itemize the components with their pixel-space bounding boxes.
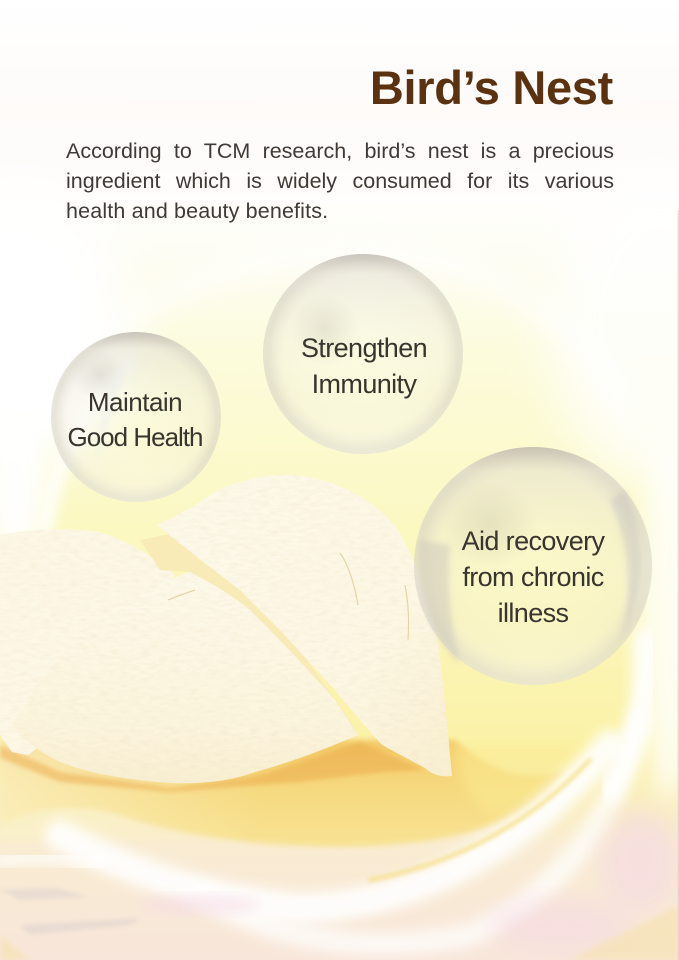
nest shadow on cloth bbox=[0, 742, 425, 792]
white fade at upper corners and sides bbox=[0, 190, 130, 470]
pale yellow patch right of nest bbox=[450, 745, 590, 815]
intro text bbox=[66, 139, 614, 223]
bird's nests bbox=[0, 475, 452, 792]
bubble: maintain good health bbox=[51, 332, 221, 502]
bubbles bbox=[51, 254, 652, 685]
nest: front bbox=[12, 572, 358, 783]
nest: right bbox=[157, 475, 452, 776]
bubble: aid recovery bbox=[414, 447, 652, 685]
inner shadow between nests bbox=[140, 530, 360, 735]
nest: back left bbox=[0, 529, 175, 755]
bubble text: strengthen immunity bbox=[301, 333, 427, 399]
bubble text: strengthen immunity: Immunity bbox=[312, 369, 416, 399]
gold cloth bbox=[0, 740, 565, 847]
bubble text: maintain good health: Maintain bbox=[88, 387, 182, 417]
bubble text: aid recovery: from chronic bbox=[462, 562, 604, 592]
bubble text: aid recovery bbox=[462, 526, 605, 628]
bubble text: aid recovery: Aid recovery bbox=[462, 526, 604, 556]
bubble text: maintain good health bbox=[68, 387, 202, 452]
title: Bird’s Nest bbox=[370, 61, 613, 114]
intro text: ingredient which is widely consumed for its various bbox=[66, 169, 614, 193]
intro text: According to TCM research, bird’s nest is a precious bbox=[66, 139, 614, 163]
bubble text: maintain good health: Good Health bbox=[68, 422, 202, 452]
pastel marks in lower band bbox=[600, 810, 679, 910]
swirl rings bbox=[0, 251, 646, 944]
bubble: strengthen immunity bbox=[263, 254, 463, 454]
bubble text: strengthen immunity: Strengthen bbox=[301, 333, 427, 363]
intro text: health and beauty benefits. bbox=[66, 199, 328, 223]
bubble text: aid recovery: illness bbox=[498, 598, 568, 628]
